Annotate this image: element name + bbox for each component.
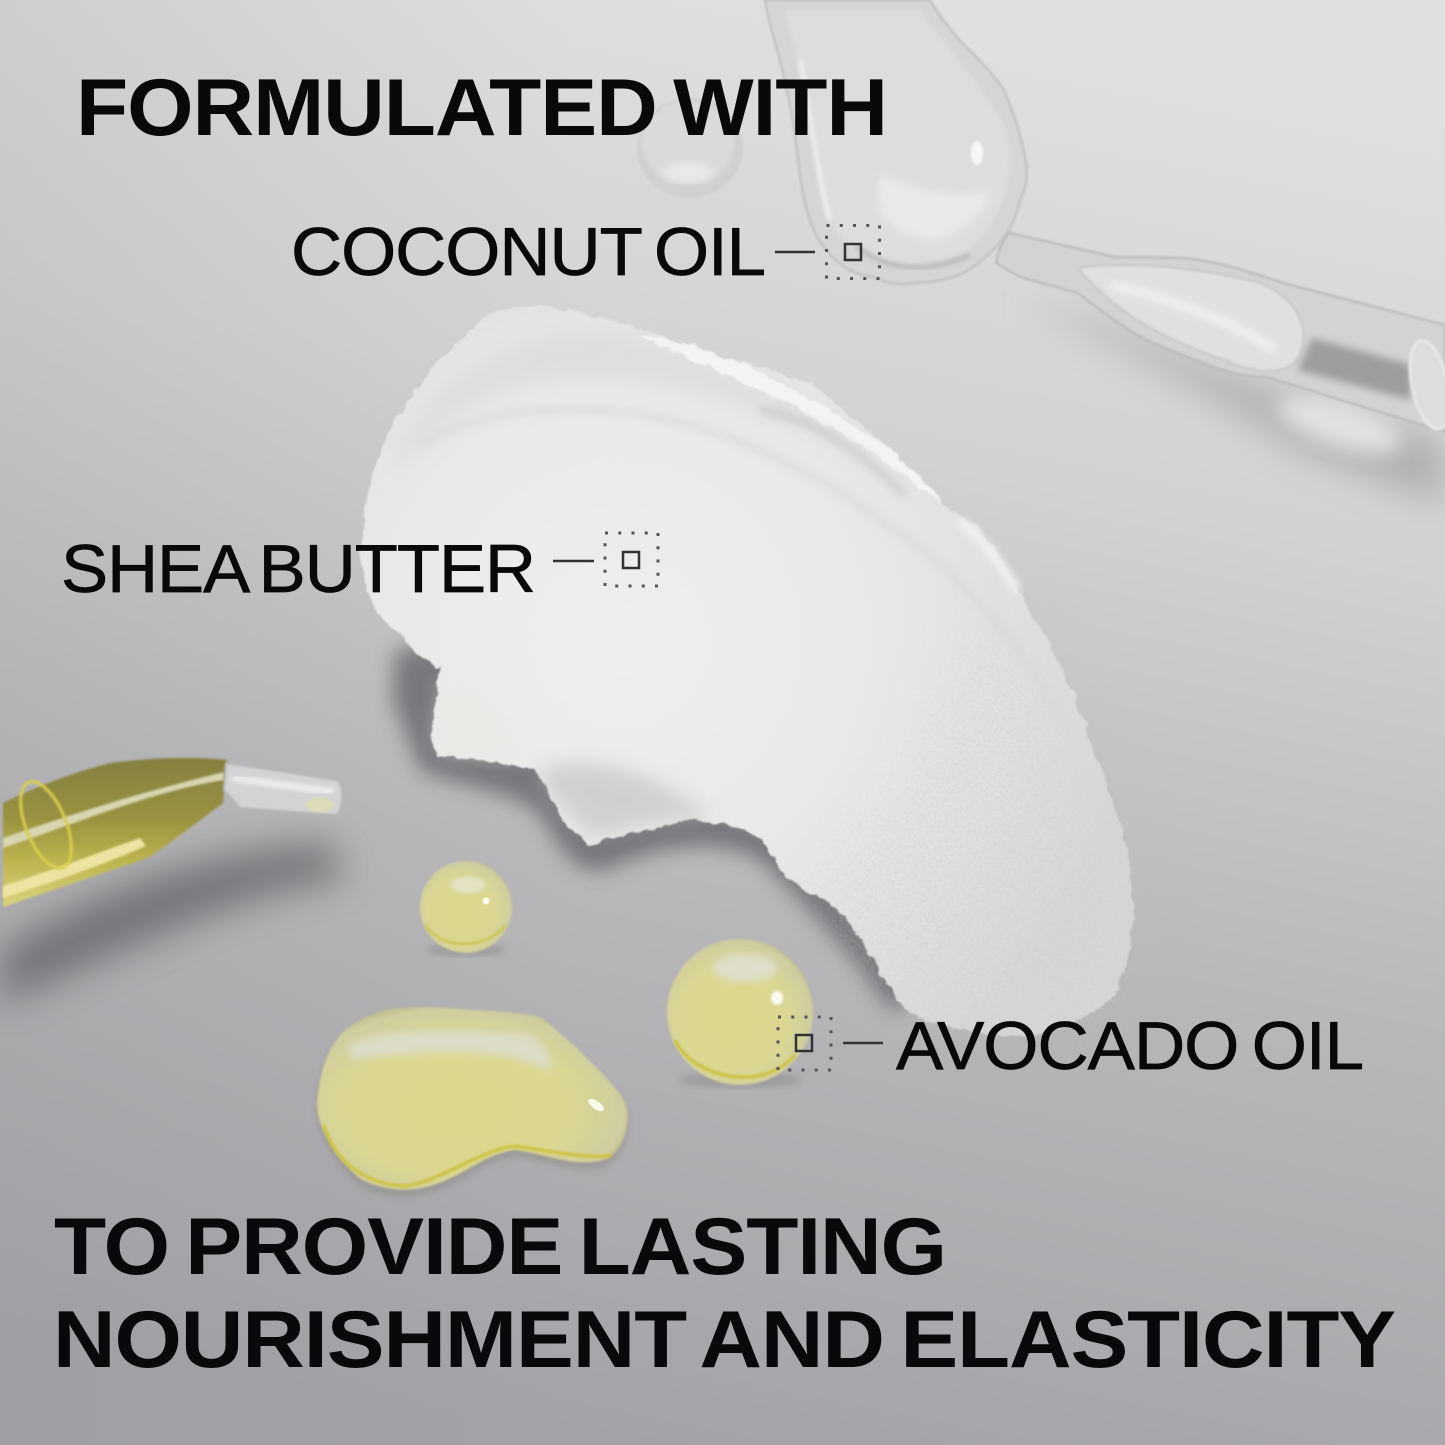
dropper bulge	[1078, 265, 1304, 371]
shea butter swatch	[358, 305, 1135, 1038]
closing statement: NOURISHMENT AND ELASTICITY	[53, 1295, 1395, 1385]
dropper stripes	[3, 772, 224, 848]
title: FORMULATED WITH	[76, 63, 887, 153]
butter lump	[436, 680, 520, 758]
glass tip	[224, 763, 342, 815]
drop inner refraction	[785, 10, 1010, 264]
small oil drop	[420, 861, 512, 956]
closing statement: TO PROVIDE LASTING	[54, 1202, 946, 1292]
butter upper rim shading	[395, 330, 880, 470]
label: coconut oil: COCONUT OIL	[291, 214, 765, 290]
closing statement	[53, 1202, 1395, 1385]
medium oil drop	[667, 939, 813, 1088]
label: avocado oil: AVOCADO OIL	[896, 1008, 1363, 1084]
clear glass dropper	[996, 233, 1445, 433]
yellow oil dropper	[3, 758, 342, 907]
yellow dropper shadow	[0, 842, 345, 1005]
label: shea butter: SHEA BUTTER	[61, 531, 535, 607]
marker: coconut oil	[775, 226, 880, 278]
large clear drop	[765, 0, 1027, 284]
butter ridge	[640, 335, 944, 504]
puddle highlights	[350, 1031, 550, 1070]
butter groove shadows	[760, 410, 905, 495]
butter fold shading	[535, 762, 715, 838]
marker: avocado oil	[778, 1017, 883, 1070]
dropper dark core	[1298, 338, 1412, 400]
butter surface grain	[814, 738, 956, 1002]
small clear droplet	[637, 98, 743, 198]
marker: shea butter	[553, 533, 658, 586]
large oil puddle	[317, 1007, 628, 1196]
clear dropper shadow	[1015, 300, 1445, 505]
butter shadow	[392, 640, 920, 1010]
